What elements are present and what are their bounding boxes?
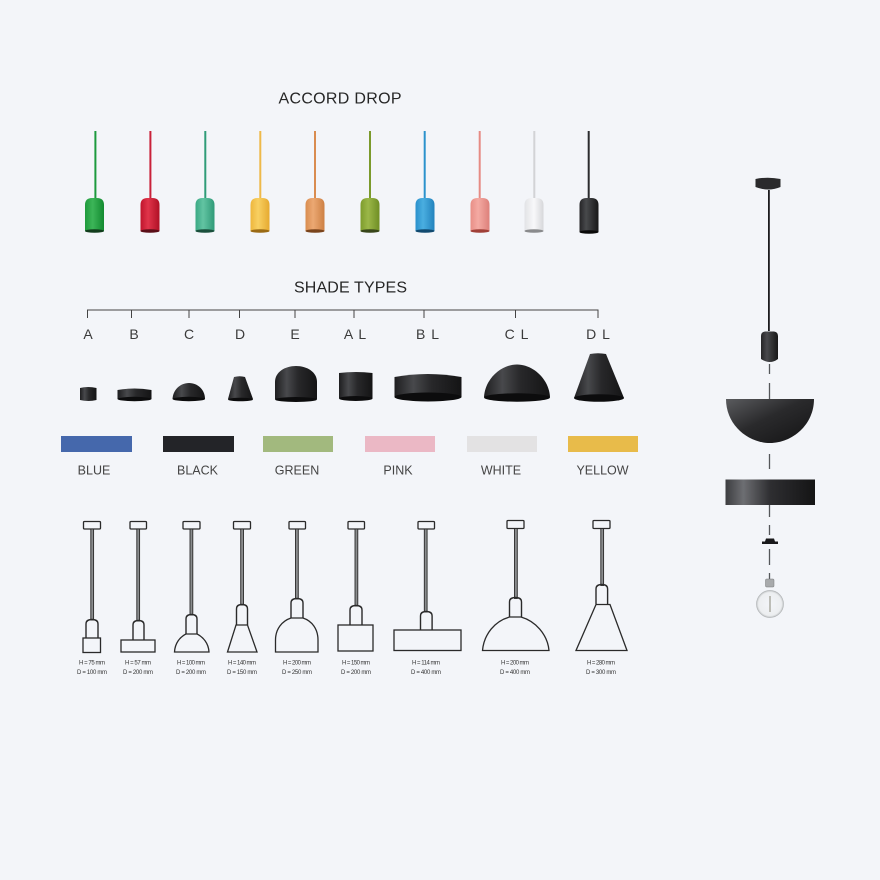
drawing A L: H = 150 mm	[342, 660, 370, 666]
shade E	[275, 366, 317, 402]
drawing C: H = 100 mm	[177, 660, 205, 666]
drawing C L: H = 200 mm	[501, 660, 529, 666]
exploded pendant assembly	[726, 178, 815, 618]
swatch: pink: PINK	[383, 464, 413, 478]
swatch: yellow: YELLOW	[576, 464, 629, 478]
drawing B: D = 200 mm	[123, 670, 153, 676]
shade type letters: C	[184, 326, 194, 342]
drawing A L: D = 200 mm	[341, 670, 371, 676]
shade B	[118, 388, 152, 401]
swatch: black	[163, 436, 234, 478]
pendant: orange	[306, 131, 324, 233]
drawing B L	[394, 522, 461, 676]
ceiling canopy	[756, 178, 780, 190]
drawing E	[276, 522, 318, 676]
bracket linking shade types	[88, 310, 598, 318]
drawing D: H = 140 mm	[228, 660, 256, 666]
drawing D L	[576, 520, 627, 676]
shade type letters: A	[83, 326, 93, 342]
pendant: teal	[196, 131, 214, 233]
heading: Shade Types: SHADE TYPES	[294, 280, 407, 296]
centre dashed axis	[768, 364, 770, 579]
drawing A: D = 100 mm	[77, 670, 107, 676]
drawing D	[227, 522, 257, 676]
drawing E: H = 200 mm	[283, 660, 311, 666]
shade type letters: A L	[344, 326, 367, 342]
swatch: blue	[61, 436, 132, 478]
drawing D L: D = 300 mm	[586, 670, 616, 676]
pendant: green	[85, 131, 104, 233]
drawing B: H = 57 mm	[125, 660, 151, 666]
pendant: olive	[360, 131, 380, 233]
shade renders row	[80, 353, 624, 402]
swatch: blue: BLUE	[78, 464, 110, 478]
drawing A L	[338, 522, 373, 676]
shade type letters: B	[129, 326, 139, 342]
shade C L	[484, 364, 550, 402]
shade C	[172, 383, 205, 401]
drawing C L: D = 400 mm	[500, 670, 530, 676]
pendant: white	[524, 131, 544, 233]
shade type letters: D	[235, 326, 245, 342]
swatch: black: BLACK	[177, 464, 219, 478]
shade type letters: E	[290, 326, 300, 342]
pendant: red	[140, 131, 160, 233]
colour swatches	[61, 436, 638, 478]
title: Accord Drop: ACCORD DROP	[278, 90, 402, 108]
shade D	[228, 376, 253, 401]
swatch: yellow	[568, 436, 638, 478]
shade A L	[339, 372, 373, 401]
pendant: yellow	[250, 131, 270, 233]
swatch: white	[467, 436, 537, 478]
drawing D: D = 150 mm	[227, 670, 257, 676]
pendant: pink	[470, 131, 490, 233]
light bulb	[756, 579, 784, 618]
small disc	[762, 538, 778, 544]
shade D L	[574, 353, 624, 402]
shade type letters: B L	[416, 326, 440, 342]
drawing C	[174, 522, 209, 676]
ring shade	[726, 480, 815, 505]
drawing A: H = 75 mm	[79, 660, 105, 666]
shade type letters: C L	[505, 326, 529, 342]
cable	[768, 190, 770, 331]
dimension line drawings	[77, 520, 627, 676]
shade A	[80, 387, 96, 401]
colour range of drop pendants	[85, 131, 598, 234]
pendant: black	[580, 131, 598, 234]
swatch: white: WHITE	[481, 464, 521, 478]
drawing B	[121, 522, 155, 676]
drawing C L	[482, 520, 549, 676]
swatch: pink	[365, 436, 435, 478]
drawing A	[77, 522, 107, 676]
drawing B L: H = 114 mm	[412, 660, 440, 666]
drawing D L: H = 280 mm	[587, 660, 615, 666]
shade B L	[394, 374, 462, 402]
swatch: green	[263, 436, 333, 478]
shade type letters: D L	[586, 326, 611, 342]
dome shade	[726, 399, 814, 443]
drawing C: D = 200 mm	[176, 670, 206, 676]
shade type letters	[83, 326, 611, 342]
socket	[761, 332, 778, 362]
drawing B L: D = 400 mm	[411, 670, 441, 676]
drawing E: D = 250 mm	[282, 670, 312, 676]
swatch: green: GREEN	[275, 464, 319, 478]
pendant: blue	[416, 131, 434, 233]
